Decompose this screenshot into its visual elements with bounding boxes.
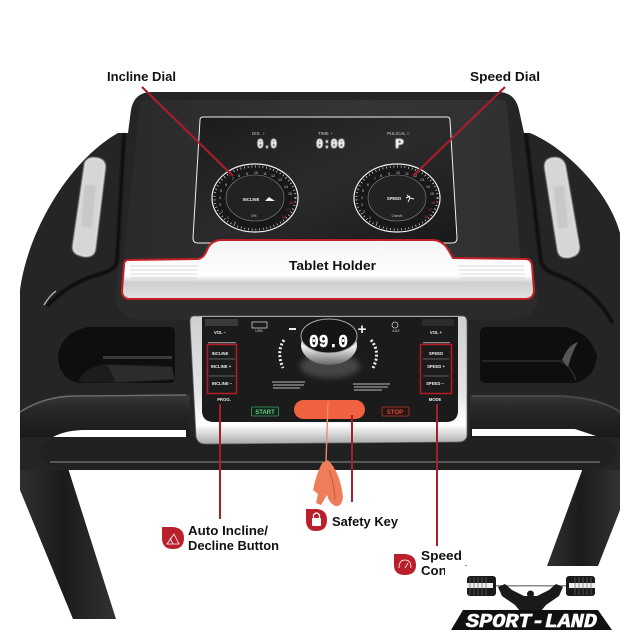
- icon: lock: [306, 509, 327, 531]
- wing grooves: [48, 135, 612, 322]
- right leg: [547, 465, 620, 566]
- incline dial: 1: [227, 216, 229, 220]
- start button: [252, 407, 278, 416]
- speed knob with display: [301, 319, 357, 365]
- pulse and calorie readout: P: [395, 137, 404, 153]
- control panel: [190, 316, 467, 444]
- speed dial: 11: [405, 172, 409, 176]
- speed dial: 2: [363, 210, 365, 214]
- time readout: 0:00: [316, 137, 345, 153]
- speed dial: 7: [374, 177, 376, 181]
- incline dial: 6: [225, 183, 227, 187]
- left side handle grip: [73, 158, 105, 256]
- speed dial: 18: [424, 215, 428, 219]
- incline dial pointer: [142, 87, 233, 176]
- left cup holder: [58, 327, 175, 383]
- speed dial: 15: [430, 192, 434, 196]
- panel lower lip: [116, 262, 538, 320]
- right side handle grip: [545, 158, 579, 257]
- left key column: PROG.: [217, 397, 231, 402]
- incline dial: 16: [289, 201, 293, 205]
- tablet holder: [122, 240, 534, 299]
- incline dial label: Incline Dial: [107, 69, 176, 84]
- holder label: Tablet Holder: [289, 258, 376, 273]
- right cup holder: [480, 327, 597, 383]
- incline dial: 14: [284, 185, 288, 189]
- left key column: [205, 319, 238, 402]
- speed dial: 17: [428, 208, 432, 212]
- incline dial: 17: [286, 208, 290, 212]
- speed dial label: Speed Dial: [470, 69, 540, 84]
- speed dial: 13: [420, 178, 424, 182]
- auto incline label: [188, 523, 279, 553]
- right level dots: [371, 340, 377, 368]
- incline dial: INCLINE: [243, 197, 260, 202]
- incline buttons pointer: [219, 404, 221, 519]
- logo wordmark: SPORT-LAND: [466, 611, 598, 633]
- speed dial: 8: [380, 174, 382, 178]
- speed dial: 1: [369, 216, 371, 220]
- speed dial: 4: [361, 196, 363, 200]
- left level dots: [280, 340, 284, 368]
- incline dial: 11: [263, 172, 267, 176]
- lower crossbar: [40, 437, 617, 470]
- speed control label: Control: [421, 563, 468, 578]
- speed knob with display: 09.0: [309, 333, 348, 353]
- display panel surround: [123, 100, 521, 262]
- distance readout: [252, 131, 277, 153]
- incline dial: 10: [254, 171, 258, 175]
- speed dial: 10: [396, 171, 400, 175]
- time readout: [316, 131, 345, 153]
- speed dial: 0 km/h: [392, 214, 402, 218]
- left key column: INCLINE +: [211, 364, 232, 369]
- speed dial: 3: [361, 203, 363, 207]
- gap under right arm: [472, 429, 596, 436]
- start button: START: [255, 410, 275, 416]
- left fine print: [272, 382, 305, 388]
- display screen: [193, 117, 457, 243]
- left key column: INCLINE: [212, 351, 229, 356]
- pulse and calorie readout: PULICAL ○: [387, 131, 410, 136]
- safety key label: Safety Key: [332, 514, 399, 529]
- left barbell plates: [467, 576, 496, 596]
- incline dial: 2: [221, 210, 223, 214]
- right key column: [420, 319, 454, 402]
- top-right panel icon: [392, 322, 400, 333]
- speed dial: 16: [431, 201, 435, 205]
- right key column: SPEED +: [427, 364, 445, 369]
- right key column: SPEED: [429, 351, 443, 356]
- right key column: SPEED –: [426, 381, 445, 386]
- auto incline label: Decline Button: [188, 538, 279, 553]
- speed control label: [421, 548, 468, 578]
- right key column: MODE: [429, 397, 441, 402]
- logo banner: [451, 610, 612, 630]
- incline dial: 5: [220, 189, 222, 193]
- gap under left arm: [53, 430, 186, 437]
- left key column: INCLINE –: [212, 381, 233, 386]
- stop button: [382, 407, 409, 416]
- incline dial: 12: [271, 174, 275, 178]
- incline dial: 7: [232, 177, 234, 181]
- speed dial pointer: [413, 87, 505, 176]
- sport-land logo: [451, 576, 612, 633]
- minus and plus marks: [289, 321, 367, 338]
- stop button: STOP: [387, 410, 403, 416]
- holder ribbing: [130, 266, 525, 282]
- safety key pointer: [351, 415, 353, 502]
- speed dial: 6: [367, 183, 369, 187]
- right fine print: [353, 384, 390, 390]
- barbell bar: [496, 585, 566, 586]
- front arm band: [20, 395, 620, 437]
- right barbell plates: [566, 576, 595, 596]
- weightlifter figure: [498, 584, 563, 611]
- time readout: TIME ◔: [318, 131, 333, 136]
- left key column: VOL –: [214, 330, 227, 335]
- icon: speedometer: [394, 554, 416, 575]
- incline dial: 18: [282, 215, 286, 219]
- top-left panel icon: [252, 322, 267, 333]
- knob shadow: [300, 354, 360, 378]
- right key column: VOL +: [430, 330, 443, 335]
- speed dial: 12: [413, 174, 417, 178]
- icon: incline: [162, 527, 184, 549]
- incline dial: 9: [246, 172, 248, 176]
- safety key socket: [294, 400, 365, 419]
- top-right panel icon: AUX: [392, 329, 400, 333]
- incline dial: 4: [219, 196, 221, 200]
- distance readout: 0.0: [257, 137, 277, 153]
- treadmill console body: [20, 92, 620, 470]
- top-left panel icon: USB: [255, 329, 263, 333]
- panel face: [202, 317, 458, 422]
- speed dial: SPEED: [387, 196, 401, 201]
- safety key clip and cord: [313, 402, 343, 506]
- logo patch: [445, 566, 640, 640]
- auto incline label: Auto Incline/: [188, 523, 268, 538]
- wing highlight: [44, 291, 56, 305]
- speed dial: 0: [376, 221, 378, 225]
- minus and plus marks: +: [358, 321, 367, 338]
- incline dial: 3: [219, 203, 221, 207]
- left leg: [20, 465, 116, 619]
- incline dial: 15: [288, 192, 292, 196]
- speed buttons pointer: [436, 404, 438, 546]
- incline dial: 0: [234, 221, 236, 225]
- distance readout: DIS. ♀: [252, 131, 265, 136]
- speed dial: 9: [388, 172, 390, 176]
- incline dial: 8: [238, 174, 240, 178]
- speed dial: 5: [362, 189, 364, 193]
- pulse and calorie readout: [387, 131, 410, 153]
- incline dial: 13: [278, 178, 282, 182]
- speed dial: [354, 164, 440, 232]
- incline dial: [212, 164, 298, 232]
- speed dial: 14: [426, 185, 430, 189]
- speed control label: Speed: [421, 548, 462, 563]
- silver frame: [190, 316, 467, 444]
- incline dial: 0%: [251, 214, 257, 218]
